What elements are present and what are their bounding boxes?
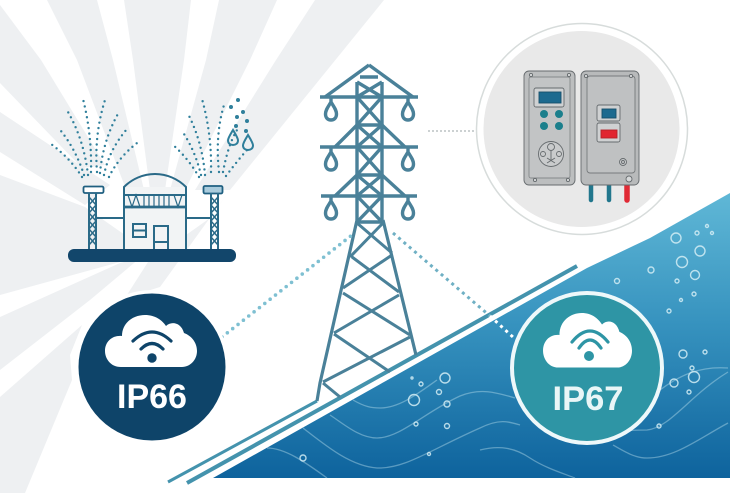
- dotted link: tower to enclosure: [428, 130, 481, 132]
- icon: transmission tower: [317, 65, 418, 401]
- wires: [591, 184, 627, 200]
- badge: IP66: [75, 290, 229, 444]
- building: [96, 174, 211, 250]
- panel: electrical enclosures: [476, 24, 688, 234]
- icon: test facility with water jets: [51, 98, 253, 262]
- background sunburst rays: [0, 0, 384, 493]
- dotted link: IP66 to tower: [222, 235, 352, 337]
- bubbles: [300, 224, 714, 461]
- badge: IP67: [512, 293, 662, 443]
- scattered droplets: [229, 98, 249, 133]
- left enclosure: [524, 71, 575, 185]
- left spray: [51, 99, 137, 177]
- icon: cloud with wifi: [105, 315, 197, 367]
- label: IP66: IP66: [117, 378, 187, 416]
- ground platform: [68, 249, 236, 262]
- right spray: [172, 99, 247, 177]
- label: IP67: IP67: [553, 380, 623, 418]
- icon: cloud with wifi: [543, 313, 632, 368]
- spray heads: [84, 186, 104, 193]
- wave lines: [267, 368, 728, 478]
- water slope: [213, 193, 730, 478]
- lattice towers: [89, 193, 218, 250]
- water drops: [228, 130, 253, 150]
- right enclosure: [581, 71, 639, 185]
- ground lines on slope: [168, 266, 577, 483]
- dashed link: tower to IP67: [393, 233, 514, 338]
